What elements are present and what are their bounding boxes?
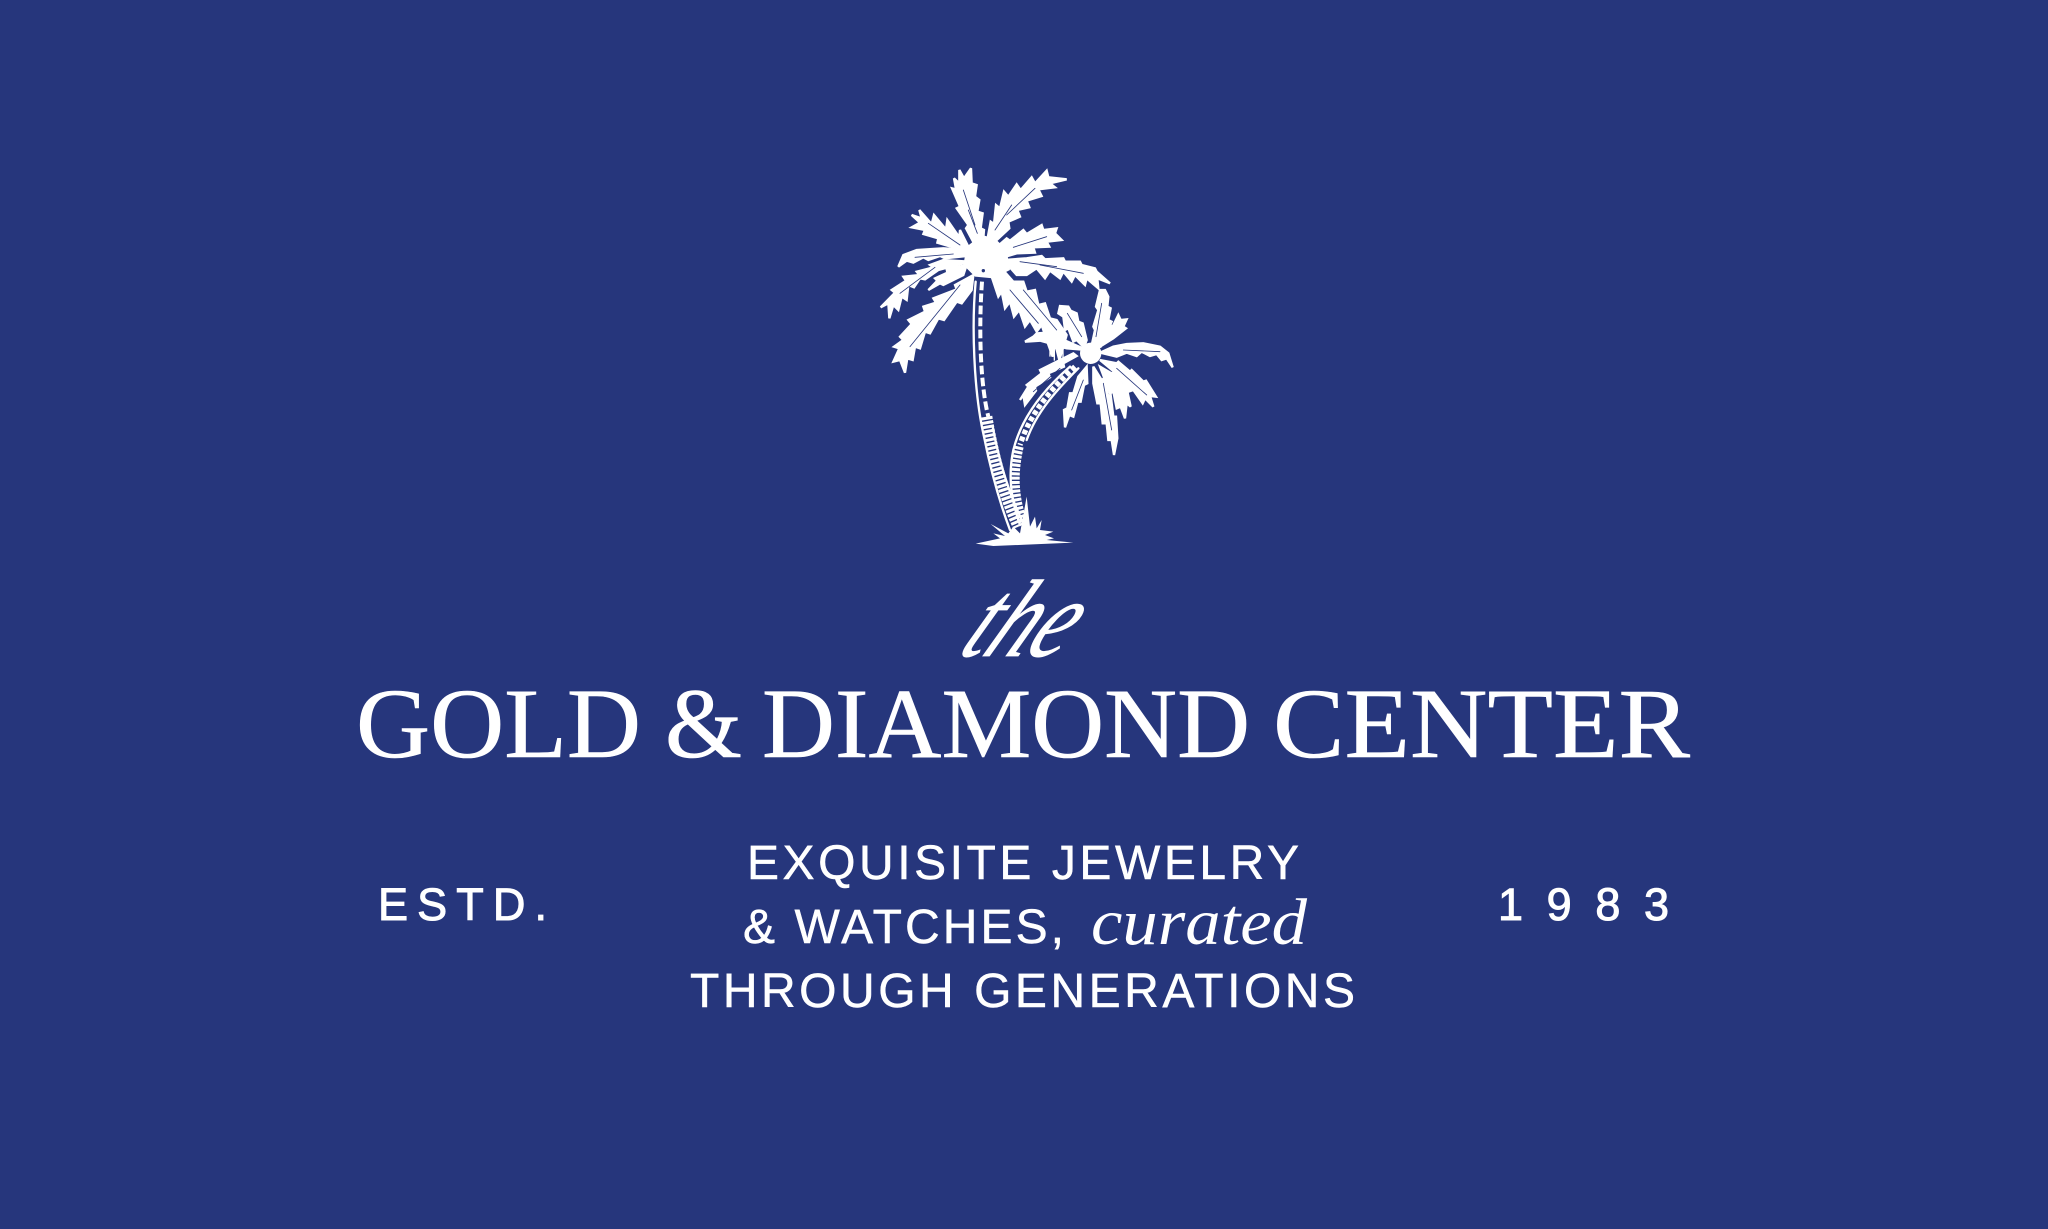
title: Gold & Diamond Center <box>356 668 1690 779</box>
icon: two palm trees <box>881 168 1173 546</box>
main palm trunk <box>974 282 1025 530</box>
main palm fronds <box>881 168 1110 373</box>
established label: ESTD. <box>378 879 547 930</box>
grass and ground <box>976 497 1073 546</box>
title: Gold & Diamond Center: GOLD <box>356 668 641 779</box>
established year: 1983 <box>1498 879 1669 930</box>
small palm fronds <box>1020 290 1173 455</box>
script word: the: the <box>942 558 1117 680</box>
tagline: THROUGH GENERATIONS <box>690 965 1355 1018</box>
title: Gold & Diamond Center: & <box>665 668 742 779</box>
title: Gold & Diamond Center: CENTER <box>1273 668 1690 779</box>
tagline: curated <box>1091 886 1308 959</box>
small palm trunk <box>1011 367 1078 525</box>
tagline: & WATCHES, <box>743 901 1064 954</box>
title: Gold & Diamond Center: DIAMOND <box>762 668 1250 779</box>
tagline: EXQUISITE JEWELRY <box>747 837 1299 890</box>
tagline <box>690 837 1355 1018</box>
